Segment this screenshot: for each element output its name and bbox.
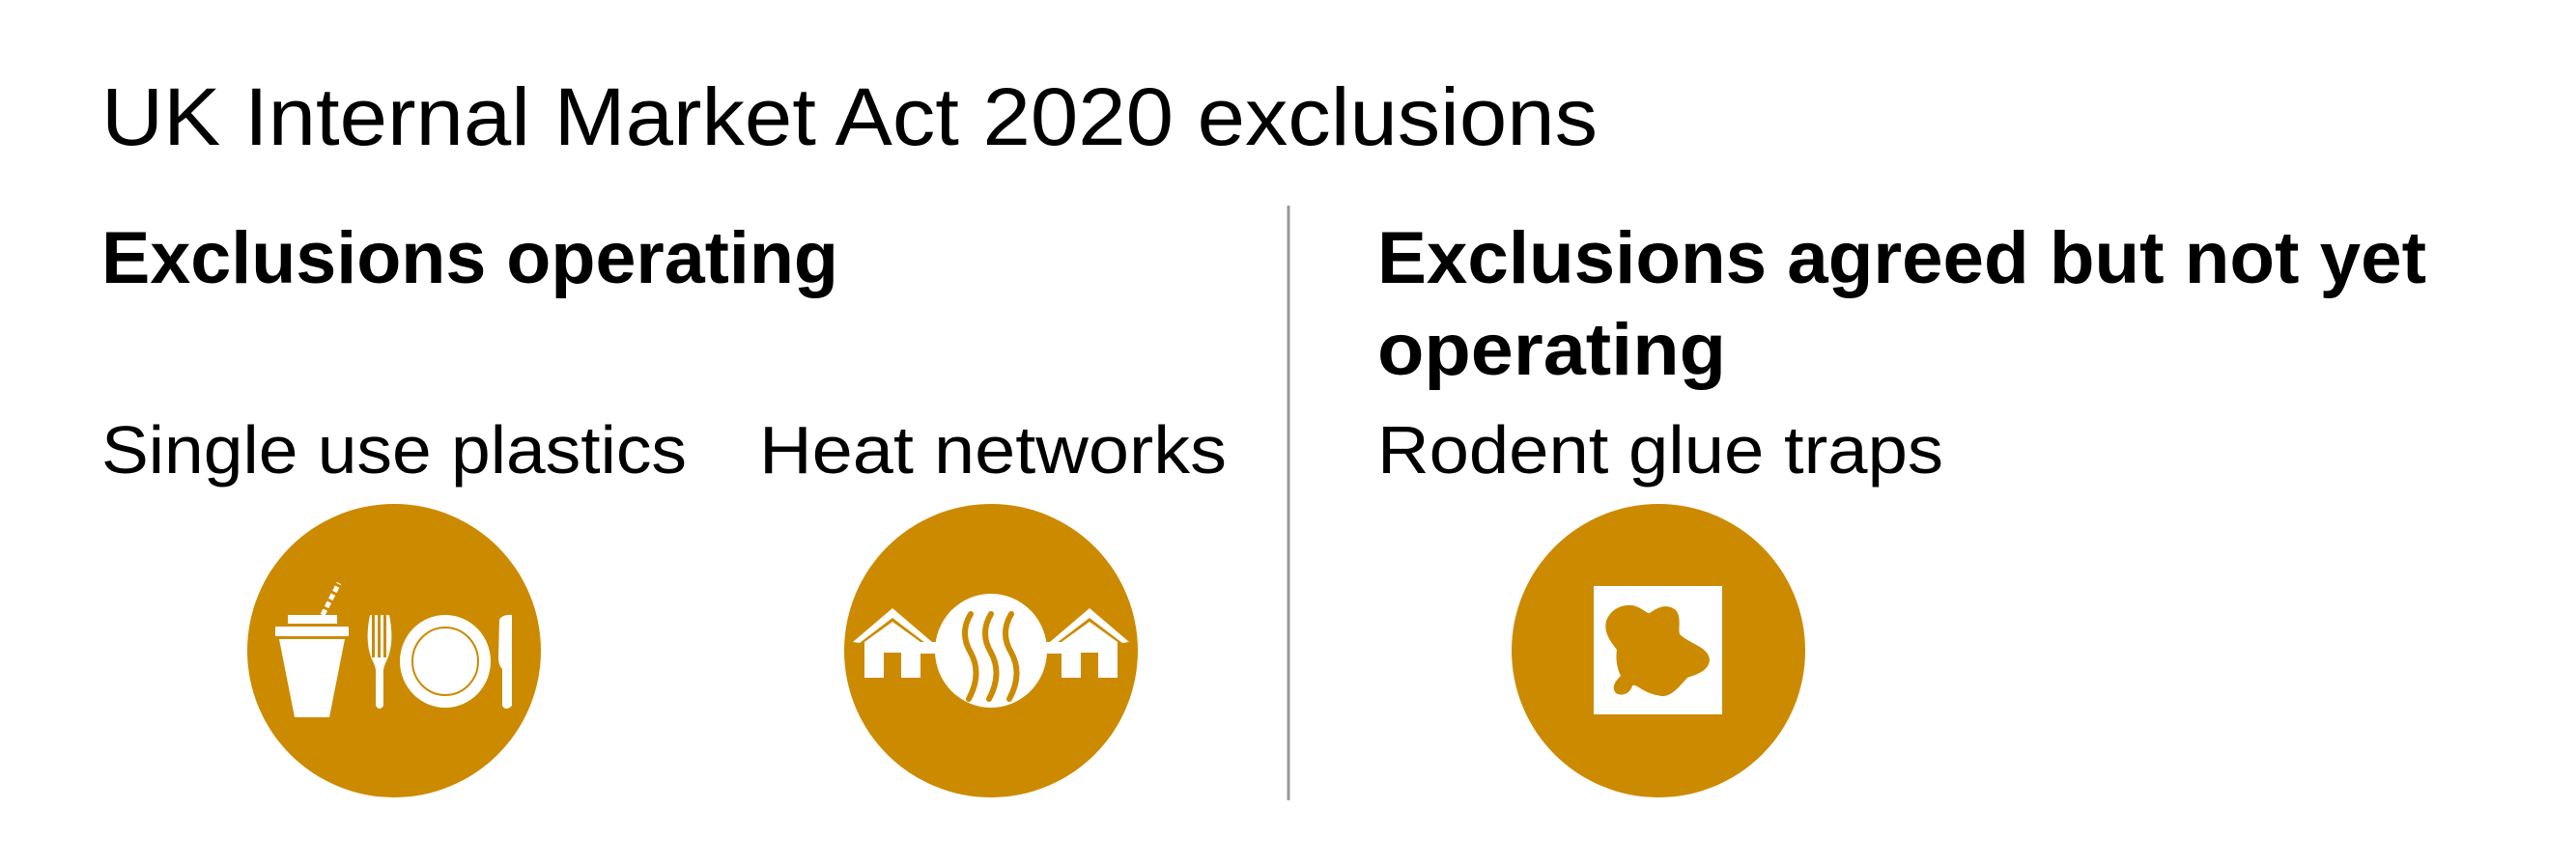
label: rodent glue traps: Rodent glue traps [1377, 412, 1943, 488]
label: heat networks: Heat networks [759, 412, 1227, 488]
heading: exclusions agreed but not yet operating [1377, 217, 2426, 391]
icon: heat networks [844, 504, 1138, 797]
divider [1287, 206, 1290, 800]
label: single use plastics: Single use plastics [101, 412, 687, 488]
title: UK Internal Market Act 2020 exclusions [101, 71, 1598, 162]
icon: single use plastics [247, 504, 541, 797]
heading: exclusions agreed but not yet operating: Exclusions agreed but not yet [1377, 217, 2426, 299]
heading: exclusions operating: Exclusions operating [101, 217, 838, 299]
icon: rodent glue trap [1512, 504, 1805, 797]
heading: exclusions agreed but not yet operating: operating [1377, 309, 1726, 391]
